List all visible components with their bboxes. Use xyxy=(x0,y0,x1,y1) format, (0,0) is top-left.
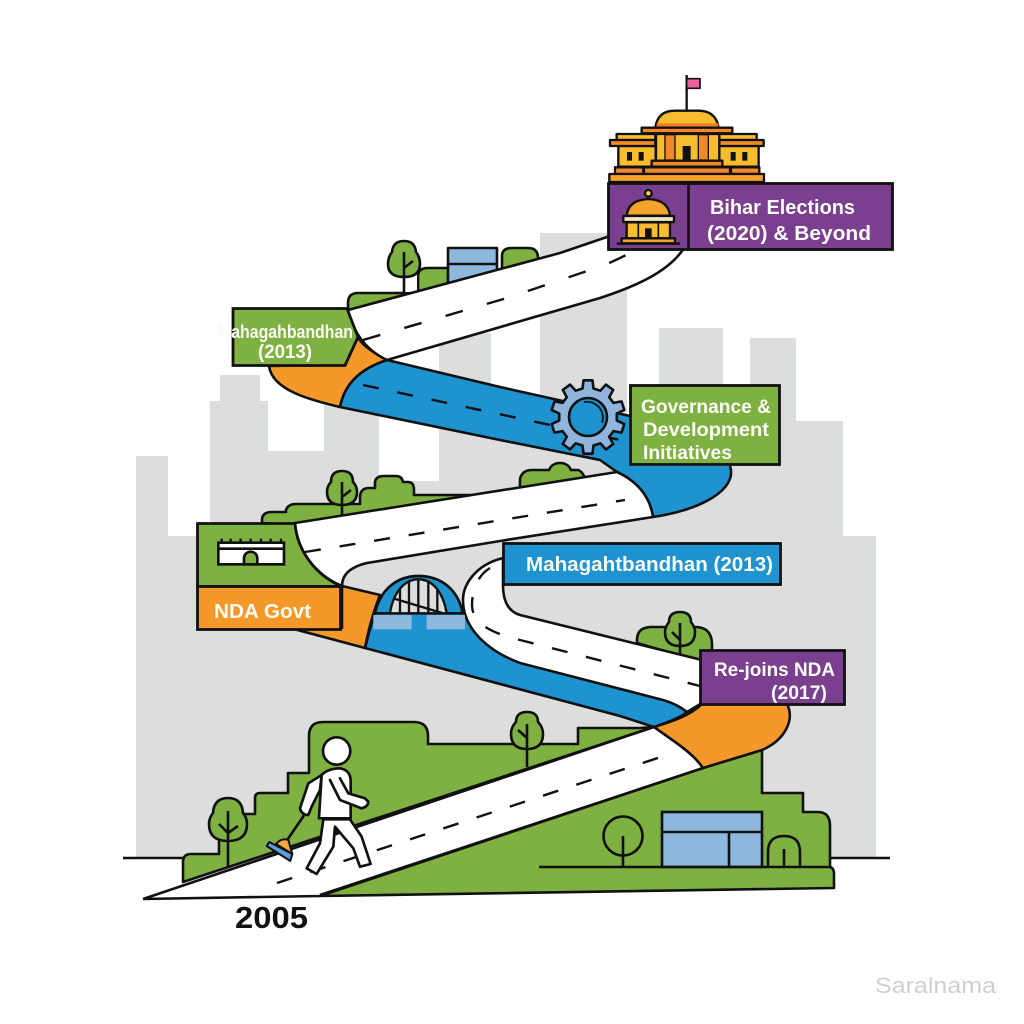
tree: behind Re-joins label xyxy=(665,612,695,655)
label: Re-joins NDA: (2017) xyxy=(771,683,827,704)
label: Mahagahtbandhan blue xyxy=(504,544,780,584)
label: Re-joins NDA: Re-joins NDA xyxy=(714,660,835,681)
icon: domed building xyxy=(617,190,680,244)
hill: top xyxy=(348,248,538,312)
label: Governance and Development: Initiatives xyxy=(643,443,732,464)
label: Bihar Elections: Bihar Elections xyxy=(710,197,855,219)
label: fort and NDA Govt: NDA Govt xyxy=(214,601,311,623)
hill: middle right bump xyxy=(520,463,585,488)
label: Mahagahtbandhan blue: Mahagahtbandhan (2013) xyxy=(526,554,773,576)
label: fort and NDA Govt xyxy=(198,524,342,630)
building: top hill xyxy=(448,248,497,285)
orange curve below NDA xyxy=(290,586,380,648)
icon: fort gate xyxy=(218,539,284,564)
orange curve right xyxy=(654,704,790,768)
tree: bottom left xyxy=(209,798,247,867)
label: Bihar Elections xyxy=(608,183,892,250)
orange curve upper left xyxy=(269,337,387,407)
hill: middle left xyxy=(262,476,477,525)
bridge xyxy=(373,576,465,629)
label: Mahagahbandhan 2013 green xyxy=(218,308,358,366)
year label 2005: 2005 xyxy=(235,900,308,935)
icon: parliament building xyxy=(609,75,764,182)
label: Mahagahbandhan 2013 green: (2013) xyxy=(258,342,312,363)
hill: bottom right with base xyxy=(320,750,834,896)
tree: top hill xyxy=(388,241,420,293)
icon: gear xyxy=(552,380,624,454)
road segment middle xyxy=(295,472,653,586)
road segment 1: 2005 start xyxy=(143,727,703,899)
tree: bottom hill centre xyxy=(511,712,543,767)
label: Governance and Development: Governance & xyxy=(641,397,771,418)
label: Governance and Development: Development xyxy=(643,420,770,441)
label: Re-joins NDA xyxy=(700,650,844,704)
hill: behind Re-joins label xyxy=(637,627,712,665)
small arched shrub xyxy=(768,836,800,867)
ground lines xyxy=(123,857,890,859)
blue road segment 4 xyxy=(340,360,731,517)
label: Governance and Development xyxy=(630,386,780,464)
white gap beside top tree xyxy=(405,268,417,292)
label: Mahagahbandhan 2013 green: Mahagahbandhan xyxy=(218,322,353,342)
skyline background xyxy=(136,233,876,858)
label: Bihar Elections: (2020) & Beyond xyxy=(707,223,871,245)
hill: bottom left xyxy=(183,722,654,882)
river road segment 2 xyxy=(365,600,687,727)
tree: middle hill xyxy=(327,471,357,516)
watermark: Saralnama xyxy=(875,973,997,998)
building: bottom right xyxy=(662,812,762,867)
road segment 3: S curve xyxy=(463,558,702,712)
tree: bottom right xyxy=(604,816,642,867)
walking person with broom xyxy=(267,737,371,874)
road segment top xyxy=(348,236,684,360)
base line xyxy=(539,866,830,868)
